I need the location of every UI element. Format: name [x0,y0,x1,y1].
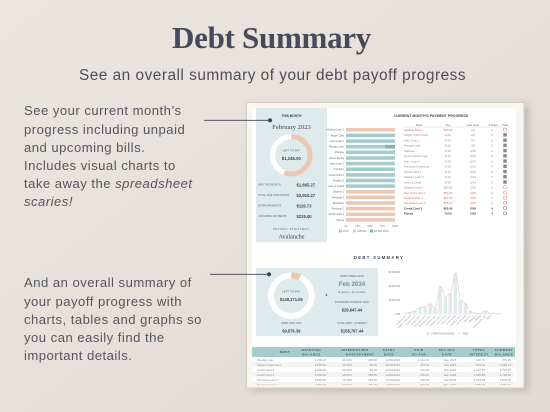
table: current month payments: 2/28 [470,212,476,216]
payoff strategy: Avalanche [278,234,305,240]
paid checkboxes [504,128,506,215]
table: debt summary: 40.00% [342,358,352,362]
table: current month payments: 2/2 [471,128,475,132]
table: debt summary: 18.90% [342,373,352,377]
rotated x-axis labels: Credit Card 2 [405,314,417,326]
table: debt summary: 1,897.06 [500,368,511,372]
chart legend: EXTRA PAID [374,230,389,233]
bar chart: payment progress: 100% [392,225,399,228]
table: current month payments: Personal Loan 1 [404,201,425,205]
table: current month payments: Due [445,123,451,127]
table: current month payments: 2/7 [471,138,475,142]
table header: TOTAL [473,348,485,352]
table header: PAY OFF [439,348,455,352]
bar chart: payment progress: Klarna [336,218,345,222]
donut: total left to pay: $149,171.05 [280,297,303,302]
table: debt summary: 5,000.00 [315,373,326,377]
table: current month payments: 2/14 [470,175,476,179]
table header: START [383,348,395,352]
table: current month payments: $.00 [445,159,451,163]
table header: PAID [414,348,424,352]
text block: current month: progress including unpaid [24,122,185,137]
rotated x-axis labels [396,314,492,329]
table: debt summary: Dec 2028 [444,373,457,377]
chart legend [339,230,389,233]
table: debt summary [252,347,515,387]
rotated x-axis labels: Furniture Loan [425,314,437,327]
table: debt summary: 215.00 [420,363,429,367]
bar chart: payment progress: Personal 1 [332,207,345,211]
table: current month payments: 75.00 [444,212,452,216]
table header: INTEREST [341,348,361,352]
table: current month payments: $.00 [445,138,451,142]
table: debt summary: 4,708.20 [500,373,511,377]
stats list: $2,910.27 [296,193,316,198]
spreadsheet contents [252,108,515,387]
table: debt summary: 12/10/2024 [386,358,400,362]
payoff strategy: PAYOFF STRATEGY [273,227,310,231]
bar chart: payment progress: Student 1 [333,190,345,194]
chart: starting balance vs paid: 10,000.00 [388,298,401,302]
table: debt summary: 2,345.89 [474,373,485,377]
table: current month payments: $.00 [445,175,451,179]
table: current month payments: 0 [491,144,493,148]
debt paid off: DEBT PAID OFF [281,321,302,325]
bar chart: payment progress: Medical 2 [333,201,345,205]
total debt plus interest: $158,767.44 [341,328,364,334]
table: current month payments: 0 [491,128,493,132]
table: debt summary: 400.00 [368,358,377,362]
table: debt summary: May 2029 [444,383,457,387]
bar chart: payment progress: 75% [380,225,386,228]
table: debt summary: 540.00 [420,383,429,387]
text block: payoff summary: your payoff progress with [24,294,182,309]
table header: SO FAR [412,353,427,357]
table: current month payments: 0 [491,149,493,153]
text block: payoff summary: And an overall summary of [24,275,192,290]
table: debt summary: 650.00 [420,373,429,377]
table header: CURRENT [495,348,513,352]
table: current month payments: $50.00 [444,206,453,210]
bar chart: payment progress: Home Equity [329,156,345,160]
table: current month payments: $50.00 [444,191,453,195]
table: current month payments: 0 [491,138,493,142]
table: debt summary: 22.00% [342,363,352,367]
stats list: UPCOMING PAYMENTS [258,214,287,218]
rotated x-axis labels: Personal Loan 1 [418,314,432,328]
bar chart: payment progress: 25% [355,225,361,228]
table: current month payments: Medical Debt 1 [404,128,424,132]
debt free date: Feb 2034 [339,281,366,288]
rotated x-axis labels: Home Equity [446,314,457,326]
table: current month payments: 0 [491,170,493,174]
table: debt summary: 12/19/2024 [386,378,400,382]
stats list: $225.00 [296,214,312,219]
panel: this month [256,108,327,242]
table: debt summary: 2,000.00 [315,368,326,372]
table: current month payments: 2/20 [470,201,476,205]
table: current month payments: $.00 [445,149,451,153]
text block: payoff summary: charts, tables and graphs so [24,312,202,327]
table: current month payments: Medical Debt 2 [404,196,424,200]
rotated x-axis labels: Klarna Card Loan [472,314,487,329]
text block: payoff summary: you can easily find the [24,330,165,345]
table: debt summary: 100.79 [476,358,485,362]
heading: payment progress: CURRENT MONTH'S PAYMENT PROGRESS [394,114,469,118]
donut: left to pay: LEFT TO PAY [283,148,300,152]
table: debt summary: Credit Card 2 [257,368,275,372]
bar chart: payment progress: Payday Loan [329,145,345,149]
table: current month payments: 2/3 [471,133,475,137]
table: debt summary: Personal Loan 2 [257,378,278,382]
table: current month payments: 2/9 [471,144,475,148]
table: current month payments: $.00 [445,180,451,184]
chart legend: STARTING BALANCE [431,333,455,336]
table: current month payments: Due Date [467,123,480,127]
table: current month payments: 2/20 [470,196,476,200]
table: debt summary: 12.00% [342,378,352,382]
stats list: PAID THIS MONTH [258,182,281,186]
stats list: EXTRA PAYMENTS [258,204,281,208]
estimated interest paid: $29,647.44 [342,308,363,312]
bar chart: payment progress: Credit Card 1 [329,212,345,216]
bar chart: payment progress: Target Card [330,133,345,137]
table: current month payments: 0 [491,180,493,184]
rotated x-axis labels: Other [486,314,492,321]
table: current month payments: $50.00 [444,128,453,132]
table: debt summary: 12/10/2024 [386,363,400,367]
bar chart: payment progress: 50% [367,225,373,228]
table: debt summary: 270.39 [502,358,511,362]
rotated x-axis labels: Auto Loan 1 [441,314,452,325]
bar chart: payment progress: Line of Credit [329,184,344,188]
table: debt summary: 145.00 [368,378,377,382]
debt paid off [281,321,302,334]
panel: this month: February 2023 [272,124,312,131]
table header: RATE [346,353,356,357]
estimated interest paid: ESTIMATED INTEREST PAID [335,301,369,304]
donut: left to pay [273,137,310,174]
table: current month payments: 2/10 [470,154,476,158]
total debt plus interest [337,322,368,334]
stats list: TOTAL DUE THIS MONTH [258,193,289,197]
donut: total left to pay: LEFT TO PAY [282,290,300,294]
bar chart: payment progress [326,128,399,233]
table: debt summary: 12/14/2024 [386,368,400,372]
table: current month payments: # Days [488,123,498,127]
table: current month payments: Auto Loan 1 [404,138,420,142]
table: debt summary: 60.00 [370,368,377,372]
debt free date [338,274,366,294]
table: current month payments: $50.00 [444,186,453,190]
table: current month payments: 4 [491,206,493,210]
chart: starting balance vs paid: 20,000.00 [388,284,401,288]
table: debt summary: 5,000.00 [315,378,326,382]
stats list [258,182,316,219]
heading: debt summary: DEBT SUMMARY [354,255,404,260]
table: current month payments: 2/19 [470,191,476,195]
table header: DATE [442,353,452,357]
bar chart: payment progress: Auto Loan 2 [330,162,345,166]
table: current month payments: Target Credit Card [404,133,428,137]
table header: DATE [384,353,394,357]
arrow: summary pointer [210,272,271,276]
table header [252,347,515,357]
donut: left to pay: $1,245.00 [282,156,301,161]
table: current month payments: $.00 [445,144,451,148]
table: current month payments: $.00 [445,165,451,169]
table: debt summary: 1,392.77 [500,363,511,367]
table: debt summary: 1,027.87 [474,368,485,372]
rotated x-axis labels: Payday Loan [396,315,407,326]
frame bottom edge [247,385,524,388]
table: debt summary: Target Credit Card [257,363,281,367]
table: current month payments: 0 [491,159,493,163]
debt free date: 8 years + 11 months [338,290,366,294]
table: current month payments: Klarna [404,212,413,216]
spreadsheet frame [246,102,529,391]
table: current month payments [403,123,511,216]
table: current month payments: Line of Credit [404,180,421,184]
table: debt summary: 180.00 [368,383,377,387]
text block: current month: See your current month’s [24,103,182,118]
table: debt summary: Mar 2029 [444,368,456,372]
table: current month payments: Furniture Financing [404,165,429,169]
chart: starting balance vs paid: 0.00 [395,312,401,316]
table: debt summary: 11.50% [342,383,352,387]
bar chart: payment progress: Student 2 [333,178,345,182]
rotated x-axis labels: Student Loan 1 [429,314,442,327]
table: current month payments: 2/10 [470,149,476,153]
rotated x-axis labels: Medical 2 [469,315,477,323]
text block: current month: and upcoming bills. [24,140,145,155]
table: current month payments: Payday Loan [404,144,421,148]
table: debt summary: Credit Card 1 [257,373,275,377]
text block: current month: Includes visual charts to [24,158,176,173]
table: current month payments: Debt [416,123,422,127]
rotated x-axis labels: Credit Card 1 [410,314,422,326]
table header: BALANCE [495,353,513,357]
table header: DEBT [280,350,290,354]
table header: BALANCE [302,353,321,357]
bar chart: payment progress: Afterpay [334,150,345,154]
table: debt summary: 12/20/2024 [386,383,400,387]
table: current month payments: $95.00 [444,201,453,205]
table: current month payments: Credit Card 2 [404,170,422,174]
rotated x-axis labels: Auto Loan 2 [436,314,447,325]
panel: debt summary [256,268,378,336]
table: current month payments: $.00 [445,154,451,158]
text block: payoff summary: important details. [24,348,132,363]
table header: PAYMENT [356,353,375,357]
table: debt summary: 1,869.39 [474,383,485,387]
chart legend [426,332,469,336]
table header: STARTING [302,348,321,352]
debt free date: DEBT FREE DATE [340,274,364,278]
table: current month payments: Afterpay [404,149,415,153]
rotated x-axis labels: Target Credit Card [397,314,412,329]
text block: current month: scaries! [24,194,73,209]
chart: starting balance vs paid: 30,000.00 [388,270,401,274]
table: current month payments: 0 [491,201,493,205]
table: current month payments: 0 [491,154,493,158]
bar chart: payment progress: Personal 2 [332,195,345,199]
table: current month payments: $.00 [445,133,451,137]
stats list: $119.73 [296,204,312,208]
table: debt summary: Personal Loan 1 [257,383,278,387]
rotated x-axis labels: Afterpay [474,314,482,322]
table: debt summary: 1,200.00 [315,358,326,362]
table: current month payments: Paid [502,123,508,127]
stats list: $1,665.27 [296,182,316,188]
table: current month payments: 2/14 [470,180,476,184]
title: Debt Summary [172,20,372,55]
debt paid off: $9,576.39 [282,328,301,334]
table: debt summary: Nov 2027 [444,363,457,367]
table: debt summary: 1,500.00 [315,363,326,367]
estimated interest paid [335,301,369,312]
table: debt summary: 7,500.00 [315,383,326,387]
donut: total left to pay [271,275,312,316]
table: debt summary: 4,824.06 [500,378,511,382]
rotated x-axis labels: Student Loan 2 [449,314,462,327]
chart legend: PAID [343,230,349,233]
text block: current month: take away the spreadsheet [24,176,193,191]
arrow: current month pointer [204,118,272,122]
table: current month payments: 0 [491,186,493,190]
table: current month payments: Credit Card 1 [404,206,423,210]
subtitle: See an overall summary of your debt payoff progress [79,67,466,84]
panel: this month: THIS MONTH [282,114,302,118]
table: debt summary: 420.00 [420,378,429,382]
table: debt summary: 1,219.69 [474,378,485,382]
payoff strategy [273,227,310,240]
table: debt summary: 1,021.36 [418,358,429,362]
table: debt summary: Sep 2028 [444,378,457,382]
table header: INTEREST [469,353,489,357]
table: current month payments: $.00 [445,170,451,174]
bar chart: payment progress: Medical Loan 1 [326,128,345,132]
table: current month payments: Personal Loan 2 [404,191,425,195]
chart legend: PAID [463,333,469,336]
table: current month payments: 2/12 [470,165,476,169]
table: current month payments: 2/28 [470,206,476,210]
bar chart: payment progress: Furniture [334,167,345,171]
table: debt summary: 544.02 [476,363,485,367]
rotated x-axis labels: Personal Loan 2 [413,314,427,328]
rotated x-axis labels: Line of Credit [455,314,467,326]
total debt plus interest: TOTAL DEBT + INTEREST [337,322,368,325]
table: current month payments: 2/10 [470,159,476,163]
table: current month payments: 0 [491,165,493,169]
table: debt summary: 260.00 [420,368,429,372]
bar chart: payment progress: Auto Loan 1 [330,139,345,143]
table: debt summary: 7,036.46 [500,383,511,387]
table: debt summary: 12/28/2024 [386,373,400,377]
text block: payoff summary [24,275,202,363]
rotated x-axis labels: Medical 1 [464,315,472,323]
table: current month payments: Home Equity Loan [404,154,428,158]
table: current month payments: 0 [491,191,493,195]
bar chart: payment progress: 0% [344,225,349,228]
table: current month payments: Auto Loan 2 [404,159,420,163]
table: current month payments: 4 [491,212,493,216]
table: debt summary: 21.00% [342,368,352,372]
table: current month payments: 0 [491,133,493,137]
table: debt summary: 60.00 [370,363,377,367]
table: debt summary: Payday Loan [257,358,274,362]
table: debt summary: 150.00 [368,373,377,377]
table: current month payments: 0 [491,196,493,200]
chart: starting balance vs paid [388,270,502,336]
table: current month payments: Student Loan 2 [404,175,424,179]
table: current month payments: 0 [491,175,493,179]
chart legend: UNPAID [357,230,366,233]
table: debt summary: May 2025 [444,358,457,362]
table: current month payments: $50.00 [444,196,453,200]
table: current month payments: Student Loan 1 [404,186,424,190]
table: current month payments: 2/14 [470,170,476,174]
table header: MIN. [361,348,370,352]
table: current month payments: 2/19 [470,186,476,190]
bar chart: payment progress: Credit Card 2 [329,173,345,177]
text block: current month [24,103,193,209]
